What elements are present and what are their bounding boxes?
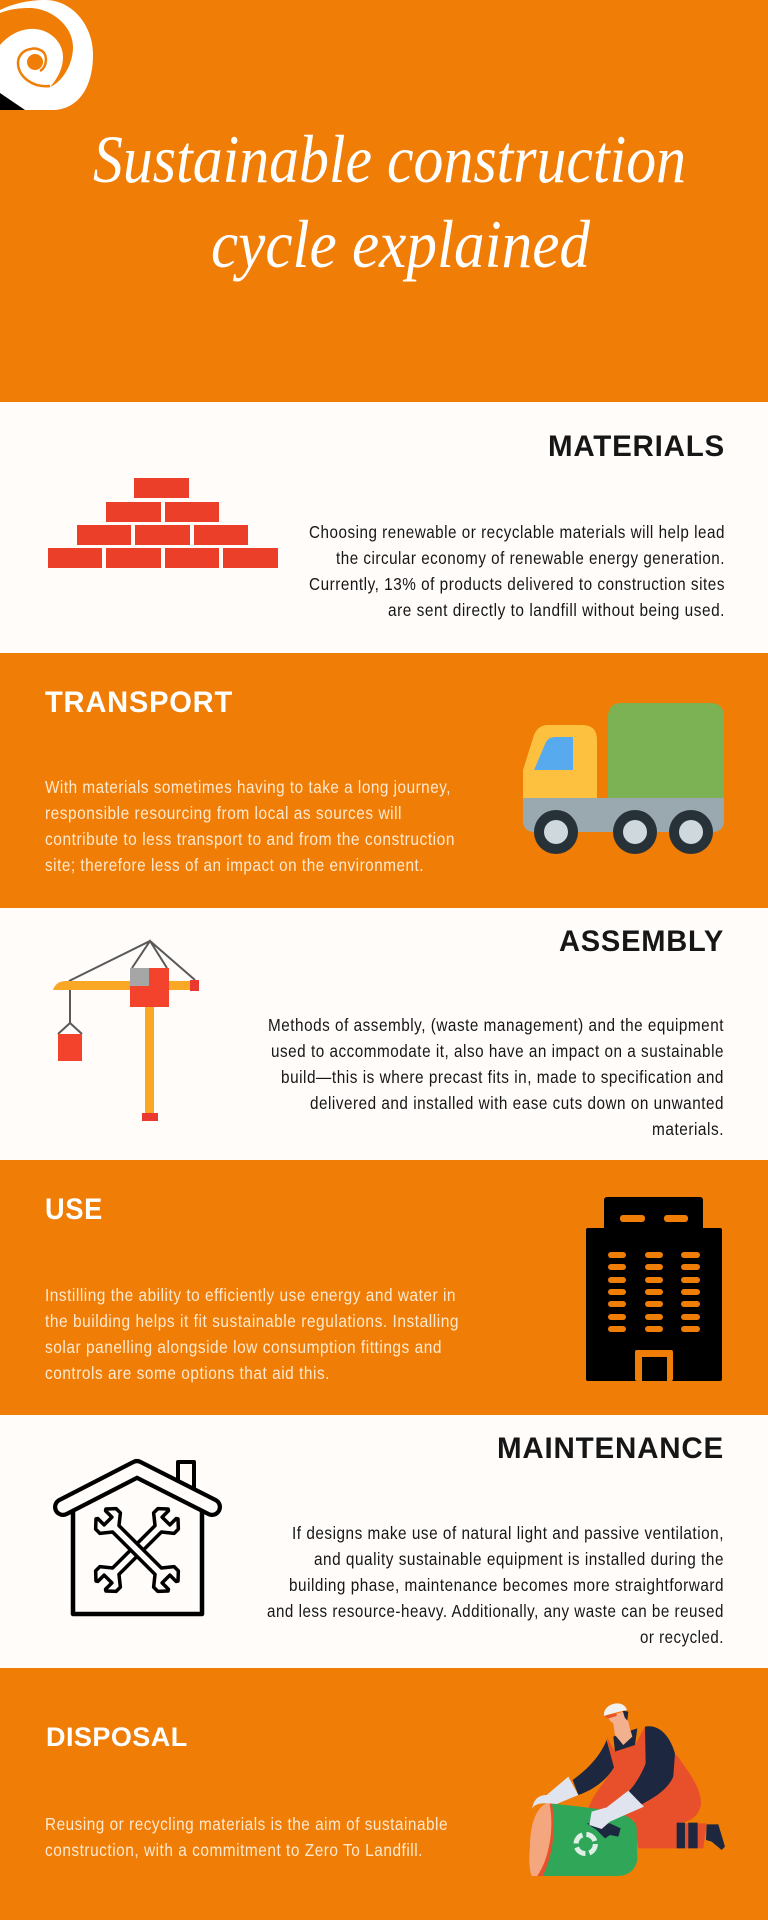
text block: transport: site; therefore less of an impact on the environment. [45,855,424,875]
panel: maintenance [0,1415,768,1668]
icon: spiral logo [0,0,93,110]
icon: brick pile [48,478,278,568]
icon: building [586,1197,722,1381]
text block: use: the building helps it fit sustainable regulations. Installing [45,1311,459,1331]
text block: use: controls are some options that aid this. [45,1363,330,1383]
heading: assembly: ASSEMBLY [559,925,724,958]
text block: disposal [45,1814,448,1860]
text block: disposal: construction, with a commitment to Zero To Landfill. [45,1840,423,1860]
icon: crane [53,941,199,1121]
panel: assembly [0,908,768,1160]
text block: maintenance [267,1523,724,1647]
panel: disposal [0,1668,768,1920]
panel: header [0,0,768,402]
text block: disposal: Reusing or recycling materials is the aim of sustainable [45,1814,448,1834]
heading: use: USE [45,1193,103,1226]
text block: transport: responsible resourcing from local as sources will [45,803,402,823]
text block: transport: With materials sometimes having to take a long journey, [45,777,451,797]
icon: worker with recycling bin [529,1703,725,1876]
heading: disposal: DISPOSAL [46,1722,188,1752]
text block: use: Instilling the ability to efficiently use energy and water in [45,1285,456,1305]
panel: materials [0,402,768,653]
panel: transport [0,653,768,908]
heading: maintenance: MAINTENANCE [497,1432,724,1465]
title: cycle explained [211,206,591,282]
text block: transport: contribute to less transport to and from the construction [45,829,455,849]
heading: materials: MATERIALS [548,430,725,463]
text block: materials: are sent directly to landfill without being used. [388,600,725,620]
icon: house with crossed wrenches [63,1462,212,1614]
heading: transport: TRANSPORT [45,686,233,719]
text block: materials [309,522,725,620]
text block: assembly [268,1015,724,1139]
text block: use: solar panelling alongside low consumption fittings and [45,1337,442,1357]
text block: transport [45,777,455,875]
text block: maintenance: or recycled. [640,1627,724,1647]
title [93,121,686,282]
text block: assembly: materials. [652,1119,724,1139]
icon: truck [523,703,724,854]
text block: use [45,1285,459,1383]
title: Sustainable construction [93,121,686,197]
panel: use [0,1160,768,1415]
